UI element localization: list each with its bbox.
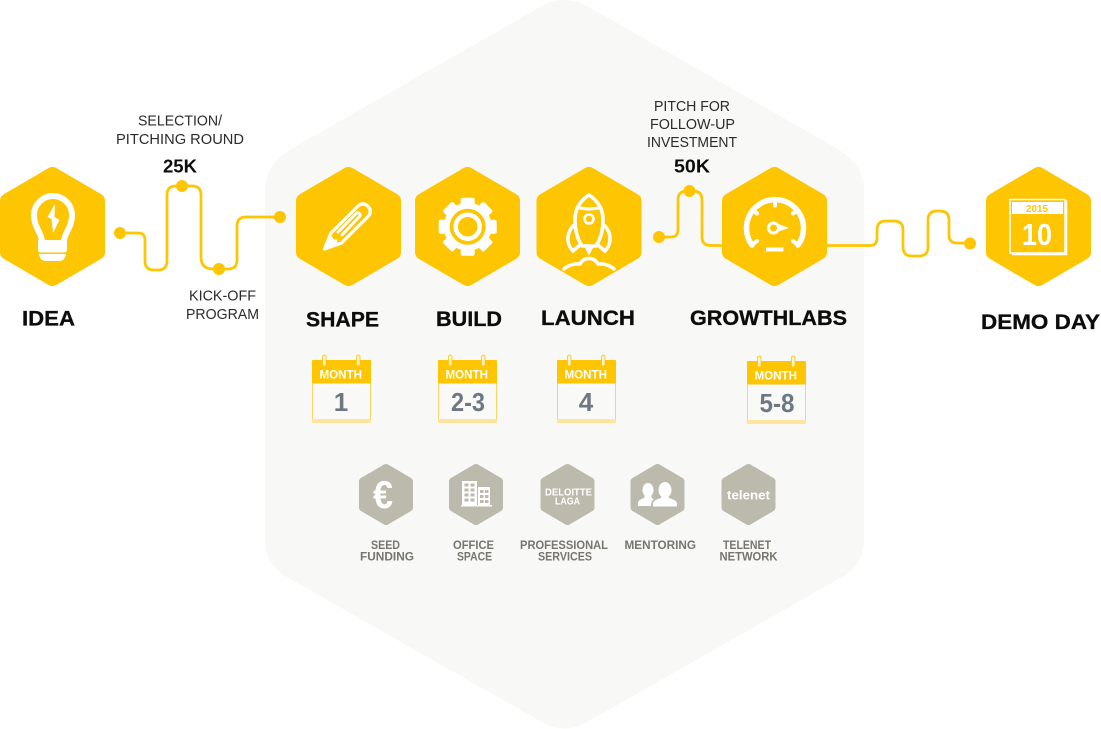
text: selection pitching round: PITCHING ROUND bbox=[116, 132, 244, 148]
calendar: month 2-3 bbox=[438, 355, 497, 423]
label: professional services bbox=[520, 540, 608, 564]
calendar: month 1: 1 bbox=[334, 387, 348, 417]
calendar: month 2-3: MONTH bbox=[446, 368, 488, 382]
icon: calendar date: 10 bbox=[1022, 217, 1052, 252]
icon: light bulb bbox=[34, 196, 72, 261]
calendar: month 1: MONTH bbox=[320, 368, 362, 382]
icon: euro: € bbox=[373, 474, 393, 517]
label: office space: SPACE bbox=[457, 552, 492, 564]
text: selection pitching round: SELECTION/ bbox=[138, 114, 223, 130]
label: telenet network: NETWORK bbox=[720, 552, 778, 564]
label: mentoring: MENTORING bbox=[624, 540, 696, 552]
step: idea bbox=[8, 175, 97, 330]
label: professional services: SERVICES bbox=[538, 552, 592, 564]
calendar: month 5-8 bbox=[747, 356, 806, 424]
calendar: month 4: 4 bbox=[579, 387, 594, 417]
label: telenet network: TELENET bbox=[723, 540, 771, 552]
label: build: BUILD bbox=[436, 308, 502, 331]
label: idea: IDEA bbox=[22, 308, 75, 330]
label: telenet network bbox=[720, 540, 778, 564]
label: professional services: PROFESSIONAL bbox=[520, 540, 608, 552]
calendar: month 1 bbox=[312, 355, 371, 423]
icon: calendar date bbox=[1010, 200, 1066, 254]
logo: deloitte laga: LAGA bbox=[555, 496, 580, 508]
logo: deloitte laga: DELOITTE bbox=[545, 486, 592, 498]
label: seed funding bbox=[360, 540, 414, 564]
text: kick-off program: PROGRAM bbox=[186, 307, 259, 323]
step: growthlabs bbox=[690, 175, 847, 330]
connector: launch to growthlabs bbox=[653, 185, 726, 246]
text: kick-off program: KICK-OFF bbox=[189, 288, 256, 304]
calendar: month 4 bbox=[557, 355, 616, 423]
label: seed funding: FUNDING bbox=[360, 552, 414, 564]
icon: calendar date: 2015 bbox=[1026, 203, 1048, 215]
icon: office buildings bbox=[461, 481, 492, 506]
text: pitch for follow-up investment: INVESTMENT bbox=[647, 135, 737, 151]
label: demo day: DEMO DAY bbox=[981, 311, 1100, 334]
icon: pencil bbox=[324, 204, 370, 250]
label: shape: SHAPE bbox=[306, 308, 379, 332]
label: seed funding: SEED bbox=[371, 540, 400, 552]
calendar: month 5-8: 5-8 bbox=[760, 388, 794, 418]
logo: telenet: telenet bbox=[727, 488, 771, 502]
benefit: professional services bbox=[520, 468, 608, 564]
connector: idea to shape bbox=[114, 180, 286, 275]
text: pitch for follow-up investment: FOLLOW-UP bbox=[650, 117, 735, 133]
label: office space bbox=[453, 540, 494, 564]
amount: 25K: 25K bbox=[163, 156, 198, 176]
calendar: month 5-8: MONTH bbox=[754, 368, 797, 382]
panel: background hexagon bbox=[265, 0, 864, 728]
label: office space: OFFICE bbox=[453, 540, 494, 552]
icon: rocket bbox=[564, 195, 614, 269]
calendar: month 4: MONTH bbox=[564, 368, 607, 382]
benefit: office space bbox=[453, 468, 499, 564]
icon: gear bbox=[439, 198, 497, 256]
step: demo day bbox=[981, 175, 1100, 334]
text: kick-off program bbox=[186, 288, 259, 323]
icon: two people bbox=[638, 482, 677, 506]
step: shape bbox=[304, 175, 393, 332]
text: pitch for follow-up investment: PITCH FOR bbox=[654, 99, 730, 115]
benefit: mentoring bbox=[624, 468, 696, 552]
connector: growthlabs to demo day bbox=[826, 211, 976, 256]
logo: deloitte laga bbox=[545, 486, 592, 508]
step: launch bbox=[541, 175, 635, 330]
benefit: seed funding bbox=[360, 468, 414, 564]
label: growthlabs: GROWTHLABS bbox=[690, 307, 847, 330]
calendar: month 2-3: 2-3 bbox=[451, 387, 485, 417]
label: launch: LAUNCH bbox=[541, 307, 635, 330]
text: selection pitching round bbox=[116, 114, 244, 148]
text: pitch for follow-up investment bbox=[647, 99, 737, 151]
amount: 50K: 50K bbox=[674, 156, 711, 176]
step: build bbox=[423, 175, 512, 331]
benefit: telenet network bbox=[720, 468, 778, 564]
icon: speedometer bbox=[746, 200, 803, 252]
